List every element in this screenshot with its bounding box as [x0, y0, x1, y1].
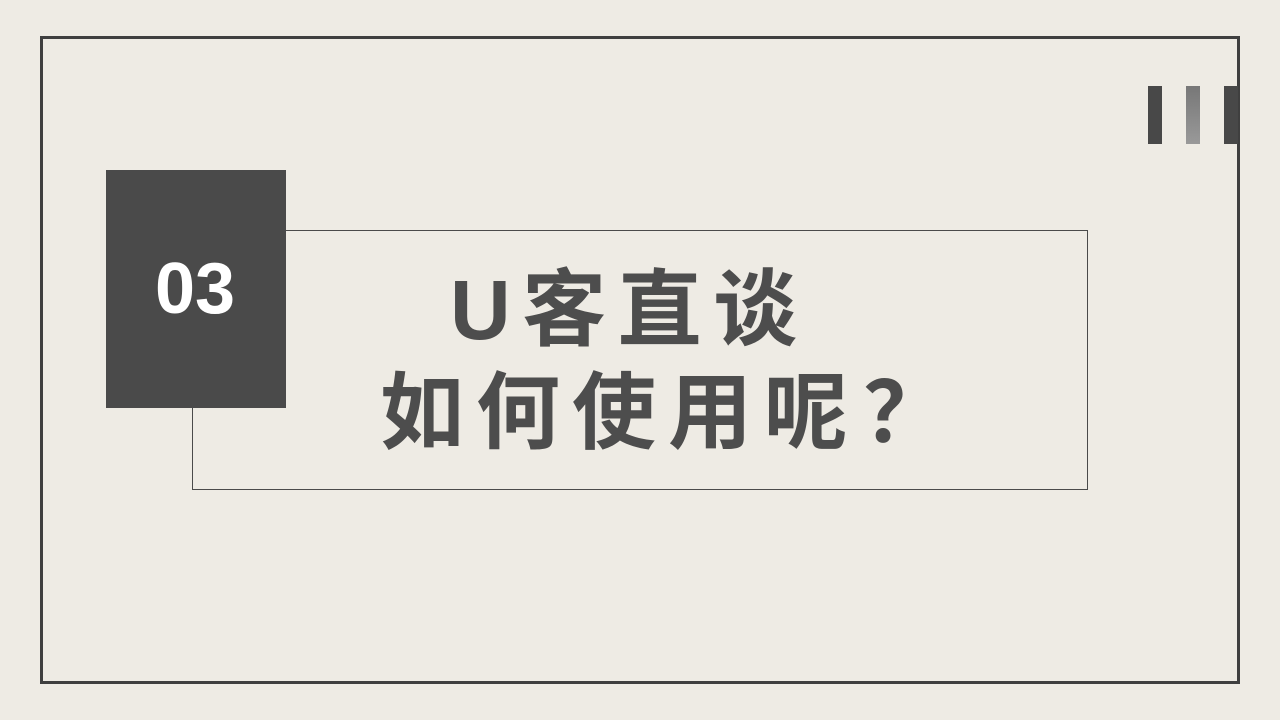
bar middle: [1186, 86, 1200, 144]
title line 2: 如何使用呢？: [380, 366, 959, 460]
bar left: [1148, 86, 1162, 144]
title outline box: [192, 230, 1088, 490]
bar right: [1224, 86, 1238, 144]
decorative bars icon: [1148, 86, 1238, 144]
number 03: 03: [155, 249, 235, 329]
title line 1: U客直谈: [450, 263, 809, 357]
number block: [106, 170, 286, 408]
